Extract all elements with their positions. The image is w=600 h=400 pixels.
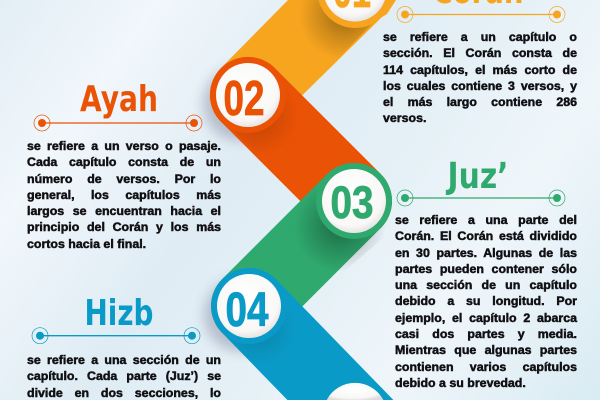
text: Corán description: los cuales contiene 3 versos, y	[383, 79, 577, 93]
text: Corán description: el más largo contiene 286	[383, 95, 577, 109]
band: green	[249, 201, 354, 306]
text: Corán description: versos.	[383, 111, 426, 125]
text: Juz' description: ejemplo, el capítulo 2 abarca	[395, 311, 577, 325]
text: Ayah description	[27, 139, 221, 251]
text: Hizb description: se refiere a una sección de un	[27, 353, 221, 367]
text: Hizb description: divide en dos secciones, lo	[27, 386, 221, 400]
text: Corán description: sección. El Corán consta de	[383, 46, 577, 60]
band: blue	[222, 280, 393, 400]
circle 04	[211, 268, 287, 344]
connector: Hizb	[32, 328, 200, 344]
title: Ayah: Ayah	[80, 79, 158, 120]
text: Juz' description: partes pueden contener sólo	[395, 262, 577, 276]
text: Hizb description	[27, 353, 221, 400]
text: Ayah description: general, los capítulos más	[27, 188, 221, 202]
circle 03	[316, 163, 392, 239]
text: Ayah description: Cada capítulo consta de un	[27, 155, 221, 169]
connector: Ayah	[34, 115, 202, 131]
text: Juz' description: debido a su longitud. Por	[395, 294, 577, 308]
circle 01	[317, 0, 393, 28]
circle 02: 02	[224, 72, 264, 126]
connector: Juz'	[397, 190, 565, 206]
text: Ayah description: se refiere a un verso o pasaje.	[27, 139, 221, 153]
text: Corán description: 114 capítulos, el más corto de	[383, 63, 577, 77]
band: orange	[248, 95, 354, 201]
title: Hizb: Hizb	[84, 293, 154, 334]
text: Juz' description: casi dos partes y media.	[395, 327, 577, 341]
text: Corán description	[382, 30, 578, 125]
text: Juz' description: una sección de un capítulo	[395, 278, 577, 292]
text: Juz' description	[395, 213, 578, 390]
text: Hizb description: capítulo. Cada parte (Juz’) se	[27, 369, 221, 383]
text: Juz' description: contienen varios capítulos	[395, 360, 577, 374]
text: Juz' description: Mientras que algunas partes	[395, 343, 577, 357]
text: Ayah description: principio del Corán y los más	[27, 220, 221, 234]
text: Juz' description: se refiere a una parte del	[395, 213, 577, 227]
circle 02	[210, 57, 286, 133]
circle 04: 04	[226, 284, 269, 337]
text: Ayah description: largos se encuentran hacia el	[27, 204, 221, 218]
text: Corán description: se refiere a un capítulo o	[383, 30, 577, 44]
circle 05	[320, 377, 390, 400]
circle 03: 03	[330, 177, 374, 228]
title: Juz': Juz’	[445, 156, 508, 197]
connector: Corán	[397, 6, 565, 22]
text: Ayah description: número de versos. Por lo	[27, 172, 221, 186]
band: yellow	[210, 0, 396, 133]
text: Juz' description: debido a su brevedad.	[395, 376, 526, 390]
text: Juz' description: Corán. El Corán está dividido	[395, 229, 577, 243]
band shadows	[203, 67, 278, 352]
text: Ayah description: cortos hacia el final.	[27, 237, 146, 251]
text: Juz' description: en 30 partes. Algunas de las	[395, 246, 577, 260]
